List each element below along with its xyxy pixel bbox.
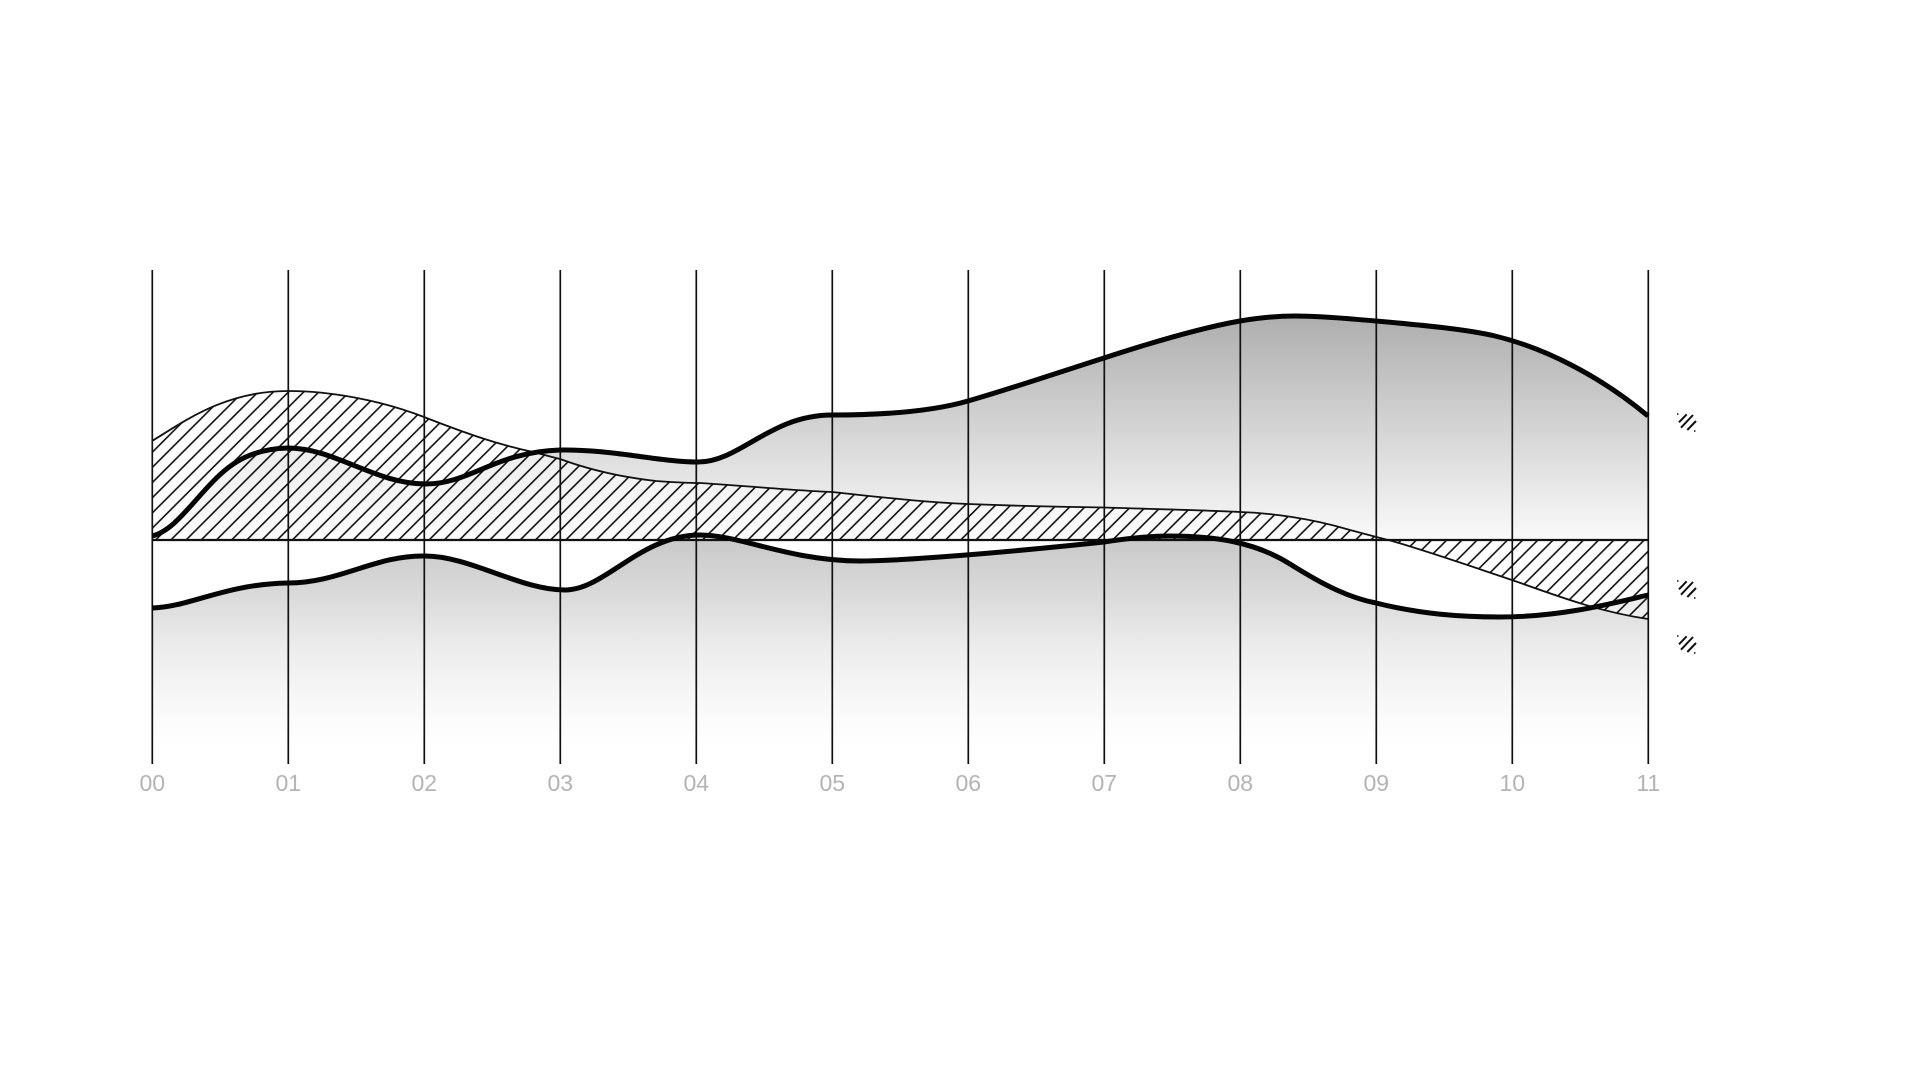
- x axis labels: 07: [1092, 770, 1117, 796]
- x axis labels: 01: [276, 770, 301, 796]
- area fill: upper series: [152, 316, 1648, 540]
- x axis labels: 10: [1500, 770, 1525, 796]
- x axis labels: 08: [1228, 770, 1253, 796]
- hatched area series: [152, 391, 1648, 619]
- line: lower series: [152, 535, 1648, 617]
- area fill: lower series: [152, 535, 1648, 763]
- x axis labels: 00: [140, 770, 165, 796]
- legend icon: lower series: [1677, 636, 1696, 653]
- x axis labels: 06: [956, 770, 981, 796]
- x axis labels: 03: [548, 770, 573, 796]
- x axis labels: 11: [1636, 770, 1660, 796]
- baseline: [152, 539, 1648, 541]
- legend icon: hatched series: [1677, 581, 1696, 598]
- x axis labels: [140, 770, 1660, 796]
- line: upper series: [152, 316, 1648, 536]
- x axis labels: 02: [412, 770, 437, 796]
- x axis labels: 09: [1364, 770, 1389, 796]
- x axis labels: 04: [684, 770, 709, 796]
- x axis labels: 05: [820, 770, 845, 796]
- legend icon: upper series: [1677, 414, 1696, 431]
- vertical grid lines: [152, 270, 1648, 764]
